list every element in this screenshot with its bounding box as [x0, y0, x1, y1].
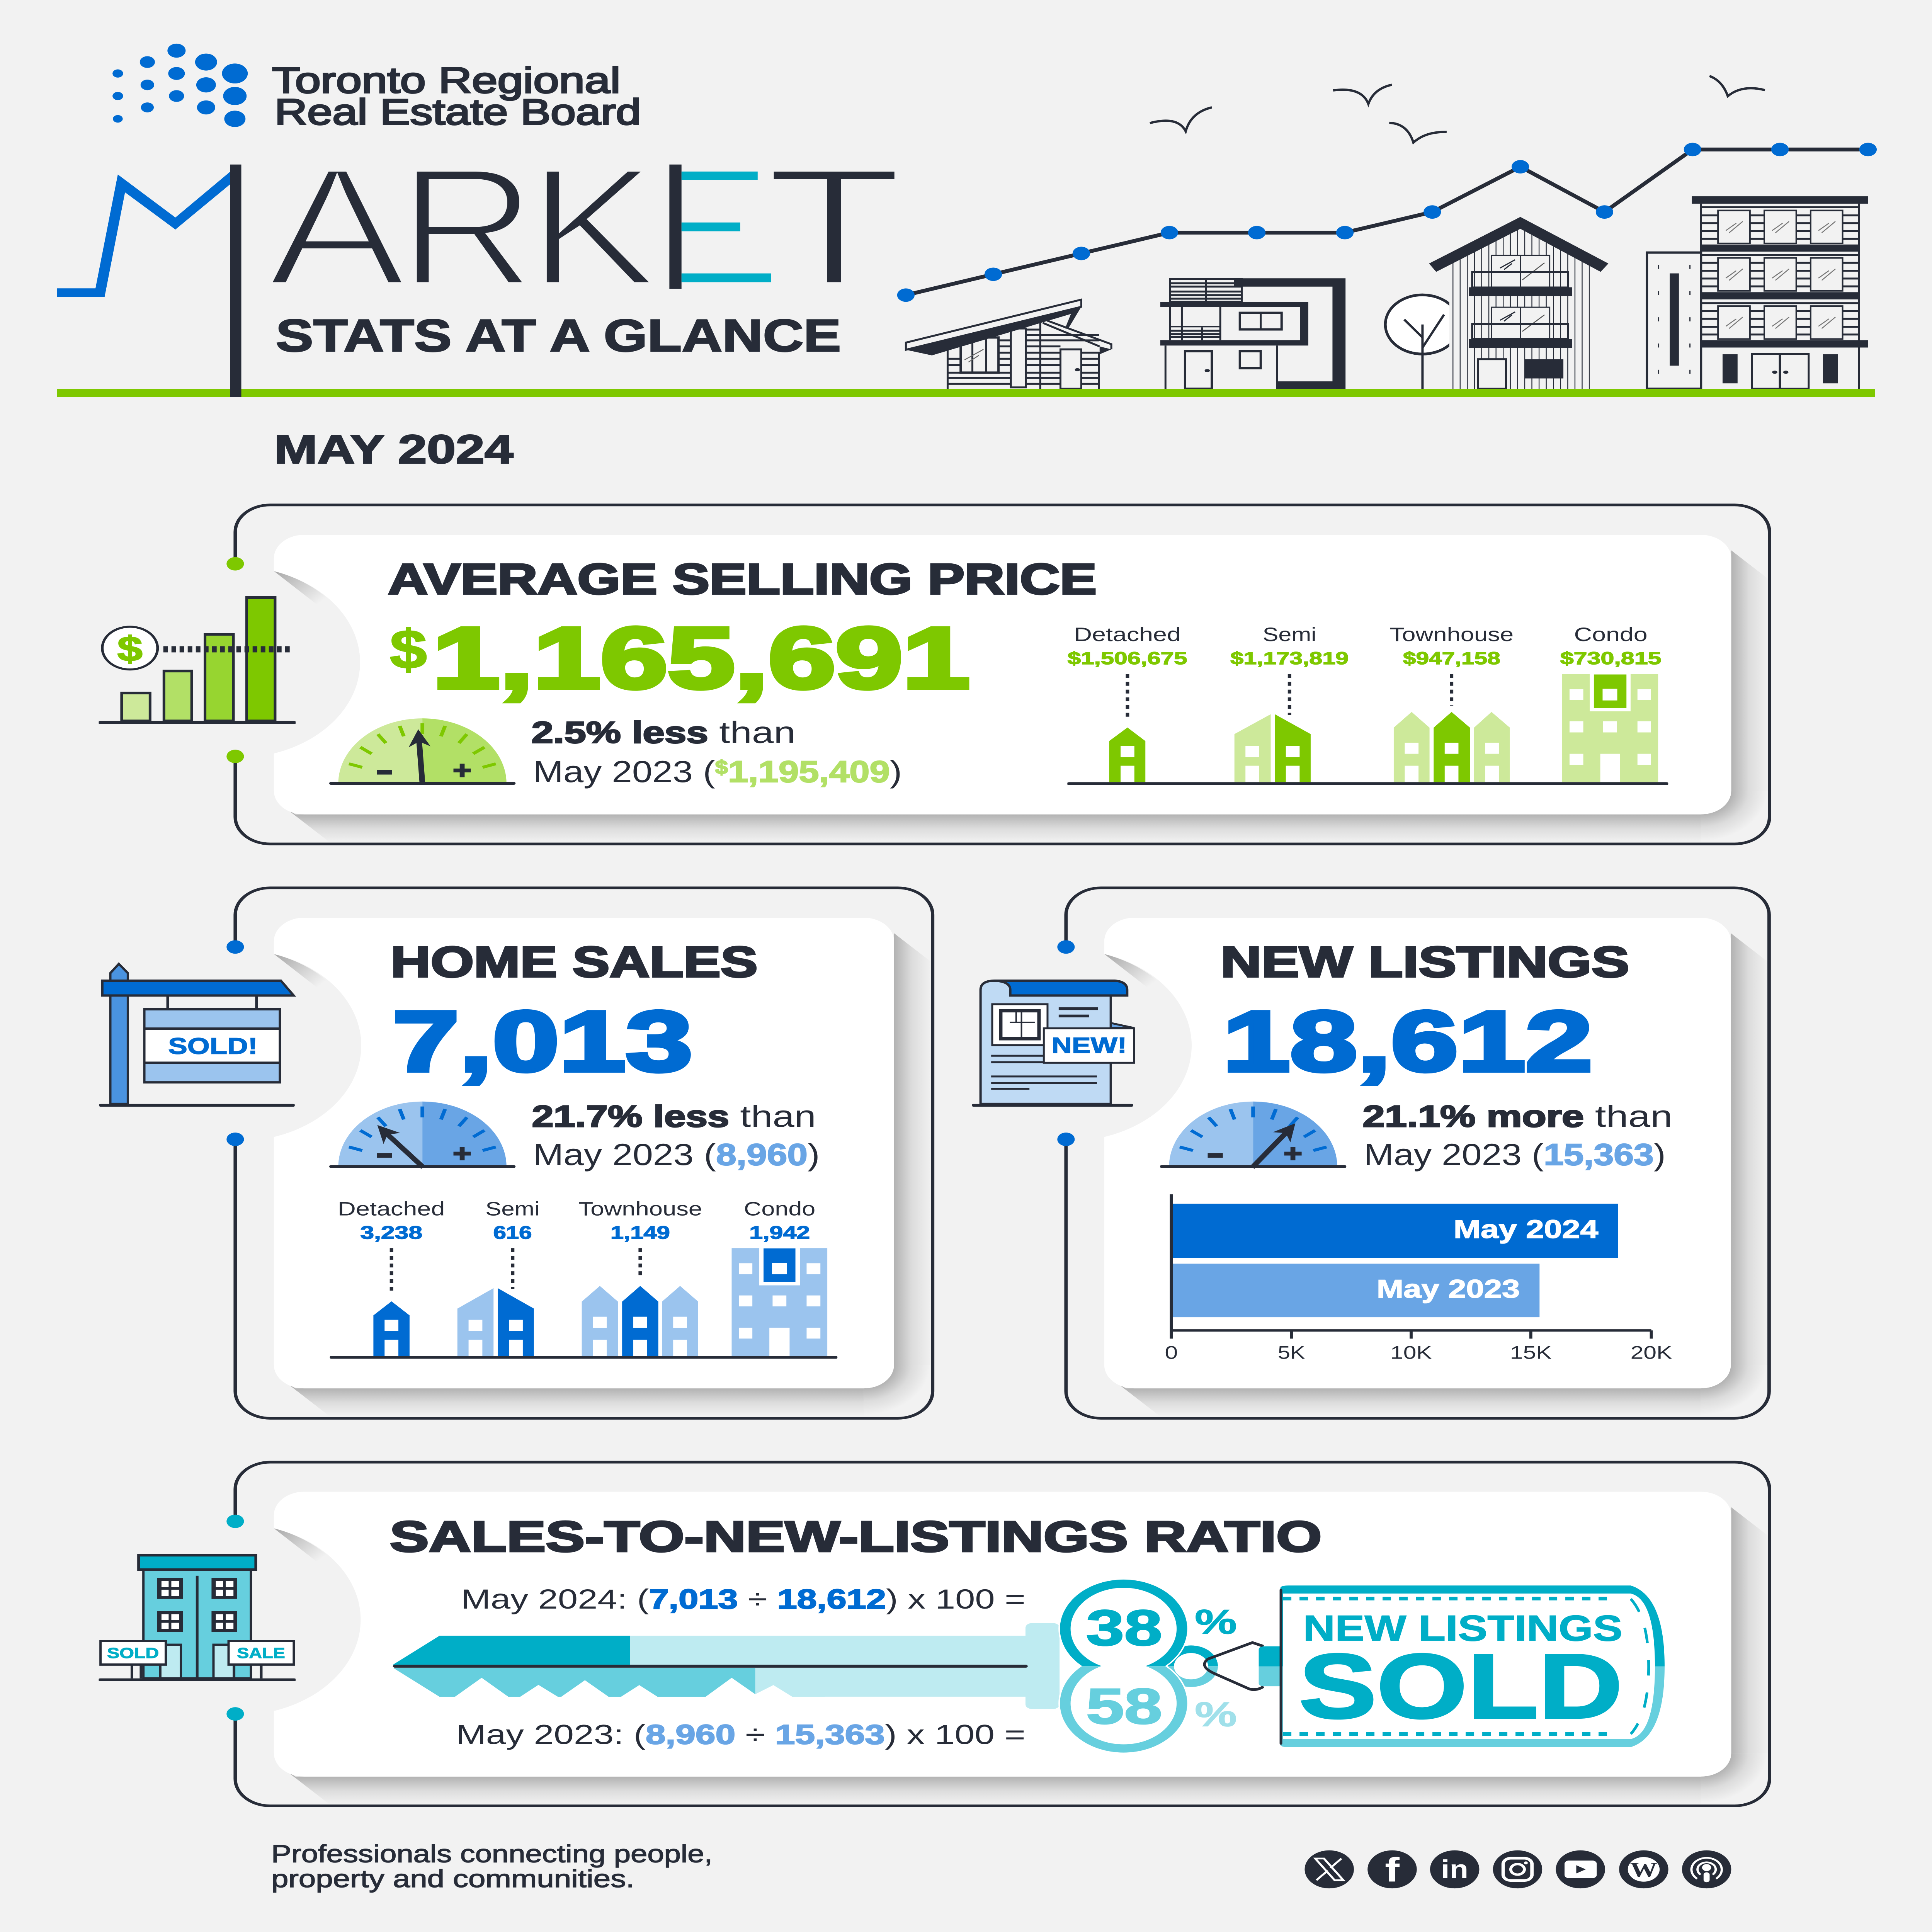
card shadow — [274, 545, 1769, 842]
comparison text: May 2023 ( — [533, 755, 730, 789]
value: 38%: 38 — [1086, 1600, 1162, 1656]
sales breakdown labels: 1,149 — [611, 1223, 670, 1243]
tag: new listings sold — [1204, 1585, 1665, 1747]
house 1 — [906, 299, 1111, 389]
icon: LinkedIn: in — [1441, 1855, 1468, 1884]
tag: new listings sold: SOLD — [1299, 1635, 1622, 1737]
icon: sold sign: SOLD! — [168, 1034, 258, 1059]
building 4 — [1647, 196, 1868, 389]
percentage rings — [1058, 1578, 1237, 1754]
heading: NEW LISTINGS — [1221, 938, 1629, 986]
sales breakdown labels: Townhouse — [578, 1198, 702, 1220]
card — [274, 1492, 1731, 1777]
icon: X — [1304, 1850, 1354, 1888]
comparison text — [531, 716, 902, 789]
card — [274, 535, 1731, 815]
house 2 — [1160, 278, 1345, 389]
comparison text: ) — [890, 755, 903, 789]
panel: home sales — [99, 888, 933, 1418]
price breakdown labels: Detached — [1074, 624, 1181, 645]
frame outline — [235, 888, 933, 1418]
sales breakdown labels: Detached — [338, 1198, 445, 1220]
sales breakdown labels: 616 — [493, 1223, 532, 1243]
footer tagline: property and communities. — [271, 1865, 634, 1893]
price breakdown labels: $1,506,675 — [1068, 648, 1187, 668]
big number: 18,612 — [1223, 993, 1593, 1089]
frame dots — [226, 940, 244, 1146]
comparison text — [532, 1100, 820, 1172]
comparison text: 2.5% less than — [531, 716, 796, 750]
price breakdown labels — [1068, 624, 1662, 668]
price breakdown labels: Townhouse — [1390, 624, 1514, 645]
value: 38% — [1086, 1600, 1237, 1656]
frame dots — [1057, 940, 1075, 1146]
icon: Facebook — [1367, 1850, 1417, 1889]
letters ARK: A — [267, 133, 408, 321]
card — [274, 918, 894, 1388]
letters ARK: K — [528, 133, 658, 321]
icon: LinkedIn — [1430, 1850, 1479, 1888]
date heading: MAY 2024 — [274, 427, 513, 472]
bar chart: 0 — [1165, 1342, 1178, 1363]
bar chart: 10K — [1390, 1342, 1432, 1363]
big number: 1,165,691 — [433, 609, 970, 706]
frame dots — [226, 1515, 244, 1721]
bar chart: May 2023 — [1377, 1275, 1520, 1303]
frame outline — [235, 1462, 1769, 1806]
gauge — [331, 1102, 514, 1173]
letters ARK: R — [398, 133, 536, 321]
bar: May 2023 — [1173, 1264, 1539, 1317]
house 3 — [1429, 217, 1609, 389]
price breakdown labels: Condo — [1574, 624, 1648, 645]
title: MARKET — [57, 133, 903, 397]
stylised E — [669, 165, 771, 289]
card shadow — [1104, 928, 1769, 1417]
icon: Instagram — [1493, 1850, 1542, 1888]
panel: new listings — [972, 888, 1769, 1418]
sales breakdown labels: 1,942 — [749, 1223, 810, 1243]
skyline illustration — [897, 76, 1877, 389]
big number: 7,013 — [393, 993, 692, 1089]
price breakdown labels: $1,173,819 — [1230, 648, 1349, 668]
icon: YouTube — [1556, 1850, 1605, 1888]
birds — [1150, 76, 1765, 143]
big number: $ — [390, 619, 427, 680]
heading: HOME SALES — [391, 938, 758, 986]
price breakdown labels: Semi — [1263, 624, 1316, 645]
bar chart: 15K — [1510, 1342, 1552, 1363]
comparison text: May 2023 (15,363) — [1364, 1138, 1666, 1172]
value: 58%: % — [1195, 1695, 1237, 1733]
key graphic — [393, 1623, 1060, 1709]
frame dots — [226, 557, 244, 763]
icon: apartment with signs: SALE — [237, 1645, 285, 1662]
bar chart — [1165, 1194, 1672, 1363]
condo — [1562, 674, 1658, 782]
logo wordmark: Toronto Regional — [272, 60, 621, 101]
comparison text — [1362, 1100, 1672, 1172]
icon: apartment with signs — [99, 1555, 296, 1681]
icon: apartment with signs: SOLD — [107, 1645, 159, 1662]
icon: logo dots — [112, 44, 248, 127]
bar: May 2024 — [1173, 1204, 1618, 1258]
price breakdown labels: $730,815 — [1560, 648, 1662, 668]
card — [1104, 918, 1731, 1388]
price breakdown labels: $947,158 — [1403, 648, 1500, 668]
card shadow — [274, 1502, 1769, 1804]
icon: new listing document: NEW! — [1051, 1033, 1127, 1058]
panel: average selling price — [99, 505, 1769, 844]
stylised M — [57, 172, 230, 297]
social icons — [1304, 1850, 1731, 1889]
sales breakdown labels: Semi — [485, 1198, 540, 1220]
footer tagline — [271, 1840, 713, 1893]
letters ARK: T — [765, 133, 903, 321]
bar chart: 5K — [1278, 1342, 1305, 1363]
value: 38%: % — [1195, 1602, 1237, 1641]
gauge — [1162, 1102, 1344, 1173]
icon: price chart: $ — [117, 629, 143, 668]
comparison text: 21.7% less than — [532, 1100, 816, 1133]
formula: May 2023: May 2023: (8,960 ÷ 15,363) x 100 = — [456, 1719, 1026, 1750]
icon: new listing document — [972, 981, 1134, 1107]
comparison text: 1,195,409 — [728, 755, 890, 789]
townhouse — [1394, 712, 1430, 782]
panel: sales-to-new-listings ratio — [99, 1462, 1769, 1806]
tree — [1385, 295, 1460, 389]
footer tagline: Professionals connecting people, — [271, 1840, 713, 1868]
semi — [1235, 714, 1271, 782]
comparison text: $ — [715, 757, 728, 778]
comparison text: 21.1% more than — [1362, 1100, 1672, 1133]
icon: sold sign — [99, 964, 295, 1107]
value: 58%: 58 — [1086, 1678, 1162, 1734]
frame outline — [235, 505, 1769, 844]
sales breakdown labels: 3,238 — [360, 1223, 422, 1243]
frame outline — [1066, 888, 1769, 1418]
subtitle: STATS AT A GLANCE — [276, 310, 841, 361]
sales breakdown labels — [338, 1198, 815, 1243]
card shadow — [274, 928, 932, 1417]
detached — [1109, 728, 1145, 782]
sales breakdown labels: Condo — [744, 1198, 815, 1220]
bar chart: May 2024 — [1454, 1215, 1598, 1243]
tag: new listings sold: NEW LISTINGS — [1303, 1608, 1622, 1649]
gauge — [331, 718, 514, 785]
logo: Toronto Regional Real Estate Board — [112, 44, 641, 133]
letters ARK — [267, 133, 903, 321]
comparison text: May 2023 (8,960) — [533, 1138, 820, 1172]
icon: WordPress: W — [1630, 1858, 1657, 1881]
icon: podcast — [1682, 1850, 1731, 1888]
heading: AVERAGE SELLING PRICE — [388, 555, 1097, 603]
logo wordmark: Real Estate Board — [275, 92, 641, 133]
value: 58% — [1086, 1678, 1237, 1734]
formula: May 2024: May 2024: (7,013 ÷ 18,612) x 100 = — [461, 1584, 1026, 1614]
heading: SALES-TO-NEW-LISTINGS RATIO — [390, 1513, 1322, 1561]
line chart — [897, 143, 1877, 302]
housing type icons — [330, 1248, 837, 1359]
bar chart: 20K — [1631, 1342, 1672, 1363]
housing type icons — [1067, 674, 1668, 785]
icon: price chart — [99, 597, 296, 724]
icon: WordPress — [1619, 1850, 1668, 1888]
ground line — [57, 389, 1875, 397]
icon: Facebook: f — [1385, 1851, 1400, 1889]
logo wordmark — [272, 60, 641, 133]
